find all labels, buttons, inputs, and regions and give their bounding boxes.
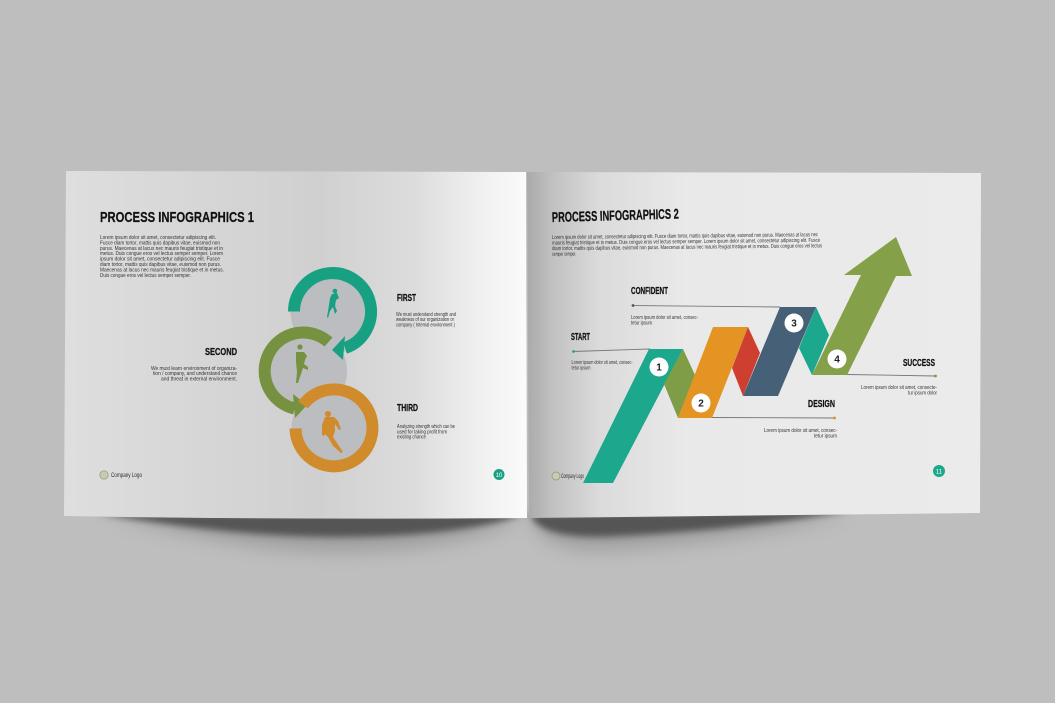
ribbon segment orange — [678, 327, 748, 418]
label: third: Analyzing strength which can be — [397, 424, 455, 430]
page number right: 11 — [936, 470, 943, 476]
page number right — [933, 465, 945, 477]
label: confident: tetur ipsum — [631, 320, 652, 326]
label: second: We must learn environment of organiza- — [151, 366, 237, 372]
intro text block: Duis congue eros vel lectus semper semper. — [100, 273, 191, 279]
ribbon segment red — [732, 327, 760, 396]
label: design: DESIGN — [808, 399, 835, 410]
page shadows — [96, 510, 852, 552]
ribbon segment olive — [664, 349, 695, 418]
label: third — [397, 403, 455, 441]
footer logo right: Company Logo — [561, 474, 584, 480]
intro text block: metus. Duis congue eros vel lectus semper semper. Lorem — [100, 251, 223, 257]
page number left: 10 — [496, 473, 503, 479]
label: design: Lorem ipsum dolor sit amet, consec- — [764, 428, 837, 434]
intro text block: semper semper. — [552, 252, 576, 258]
footer logo left: Company Logo — [111, 473, 142, 479]
icon: runner third — [322, 411, 343, 453]
arrow olive — [812, 237, 912, 375]
left page — [64, 171, 527, 519]
badge 3 — [784, 314, 804, 332]
ribbon arrow chart — [572, 237, 937, 483]
intro text block: Maecenas at lacus nec mauris feugiat tristique et in metus. — [100, 267, 224, 273]
intro text block: purus. Maecenas at lacus nec mauris feugiat tristique et in — [100, 246, 223, 252]
badge 3: 3 — [791, 318, 797, 330]
label: design — [764, 399, 837, 440]
title: process infographics 2: PROCESS INFOGRAPHICS 2 — [552, 205, 679, 225]
icon: runner first — [327, 289, 339, 318]
right page — [527, 172, 981, 518]
label: third: used for taking profit from — [397, 429, 447, 435]
ribbon segment teal upper — [799, 307, 829, 375]
label: second: tion / company, and understand chance — [153, 371, 237, 377]
badge 2: 2 — [698, 398, 704, 410]
intro text block: diam tortor, mattis quis dapibus vitae, euismod non purus. Maecenas at lacus nec mauris feugiat tristique et in metus. Duis congue eros vel lectus — [552, 243, 822, 252]
label: confident: CONFIDENT — [631, 286, 668, 297]
label: second: SECOND — [205, 347, 237, 358]
label: first — [395, 293, 456, 328]
label: first: FIRST — [397, 293, 416, 304]
intro text block: ipsum dolor sit amet, consectetur adipiscing elit. Fusce — [100, 257, 220, 263]
intro text block: Fusce diam tortor, mattis quis dapibus vitae, euismod non — [100, 240, 220, 246]
label: start: START — [571, 332, 590, 343]
label: third: THIRD — [397, 403, 418, 414]
circular process diagram — [259, 270, 376, 470]
label: design: tetur ipsum — [814, 434, 837, 440]
label: start — [571, 332, 633, 372]
label: start: Lorem ipsum dolor sit amet, consec- — [572, 360, 633, 366]
intro text block: Lorem ipsum dolor sit amet, consectetur adipiscing elit. Fusce diam tortor, mattis quis dapibus vitae, euismod non purus. Maecenas at lacus nec — [552, 232, 818, 241]
intro text block: mauris feugiat tristique et in metus. Duis congue eros vel lectus semper semper. Lorem ipsum dolor sit amet, consectetur adipiscing elit. Fusce — [552, 238, 820, 247]
label: first: company ( Internal environment ) — [396, 322, 455, 328]
footer logo left — [100, 471, 142, 479]
label: second — [151, 347, 237, 382]
title: process infographics 1: PROCESS INFOGRAPHICS 1 — [100, 209, 254, 226]
intro text block: Lorem ipsum dolor sit amet, consectetur adipiscing elit. — [100, 235, 216, 241]
label: success: tur ipsum dolor — [908, 390, 937, 396]
ring: second — [265, 332, 328, 418]
badge 4 — [828, 350, 846, 368]
leader lines — [573, 306, 935, 418]
footer logo right — [552, 472, 584, 480]
label: first: We must understand strength and — [396, 312, 456, 318]
intro text block — [552, 232, 822, 258]
intro text block — [100, 235, 224, 279]
ribbon segment teal — [583, 349, 683, 483]
label: third: existing chance — [397, 435, 426, 441]
icon: runner second — [296, 344, 308, 383]
label: success: SUCCESS — [903, 358, 935, 369]
page number left — [494, 469, 504, 480]
label: first: weakness of our organization or — [395, 317, 454, 323]
grey discs — [259, 270, 376, 470]
badge 4: 4 — [834, 354, 840, 366]
label: success: Lorem ipsum dolor sit amet, consecte- — [861, 385, 937, 391]
label: confident — [631, 286, 698, 326]
ring: first — [294, 273, 371, 360]
badge 1 — [650, 358, 668, 376]
label: confident: Lorem ipsum dolor sit amet, consec- — [631, 315, 698, 321]
intro text block: diam tortor, mattis quis dapibus vitae, euismod non purus. — [100, 262, 221, 268]
label: start: tetur ipsum — [572, 366, 591, 372]
label: second: and threat in external environment. — [161, 376, 237, 382]
ring: third — [296, 389, 372, 466]
badge 2 — [692, 394, 710, 412]
badge 1: 1 — [656, 362, 662, 374]
ribbon segment blue — [743, 307, 816, 396]
label: success — [861, 358, 937, 396]
